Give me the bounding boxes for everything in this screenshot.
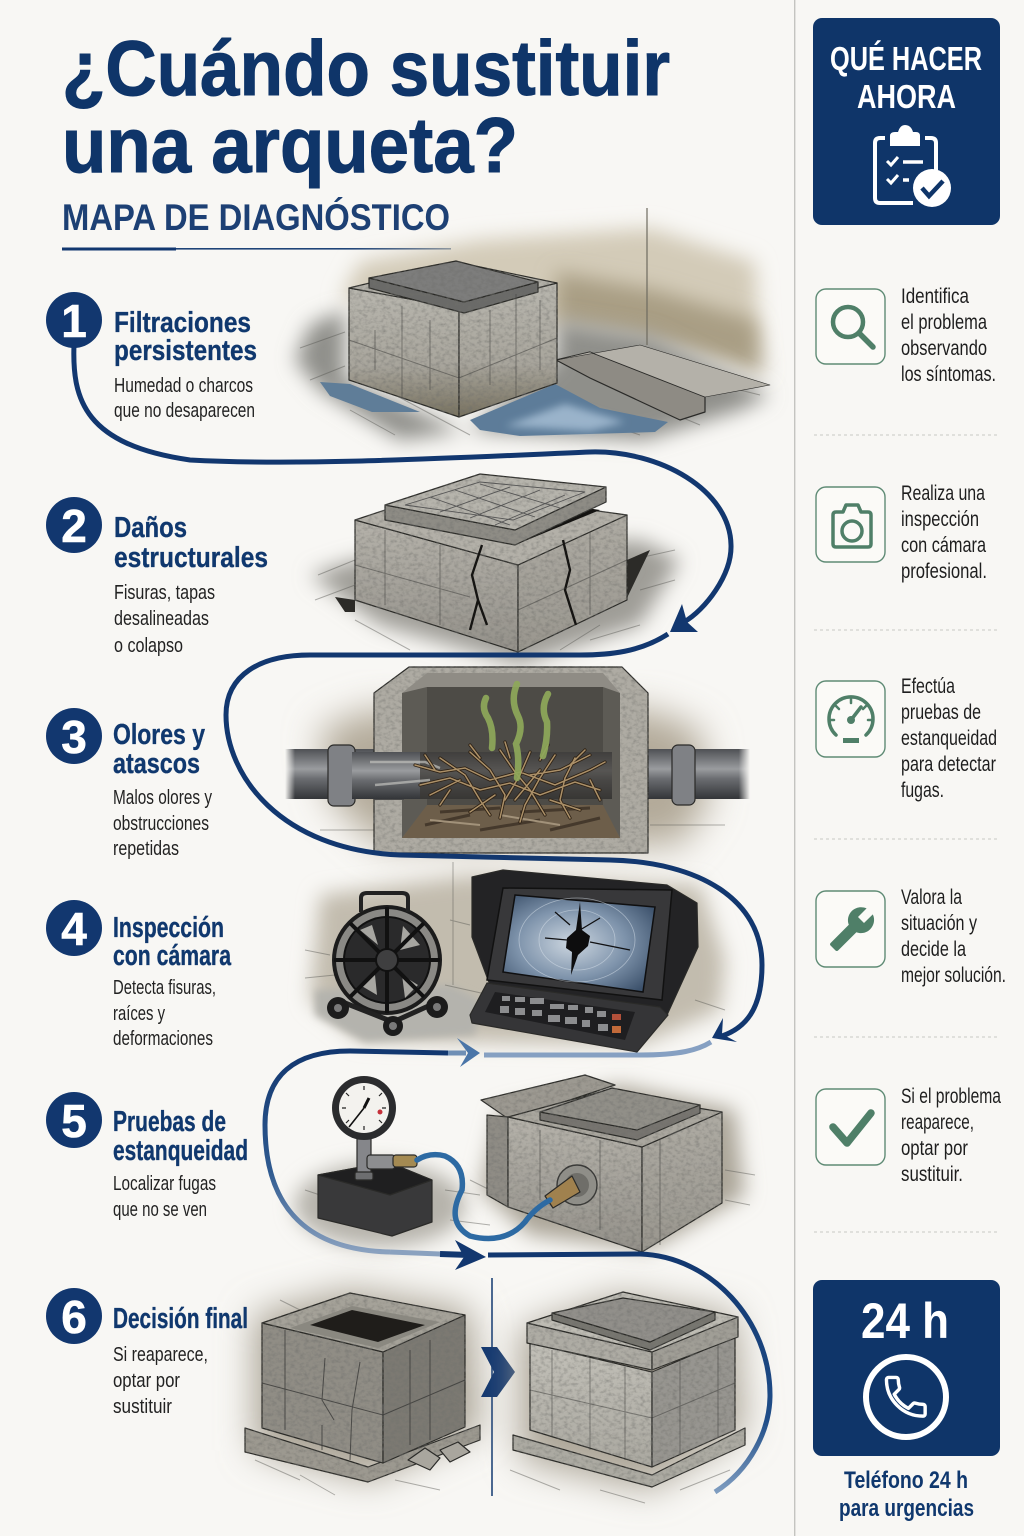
illustration 2: cracked chamber <box>310 474 680 665</box>
icon: check mark <box>816 1089 885 1165</box>
action 5 text: sustituir. <box>901 1163 963 1186</box>
step 2 description: Fisuras, tapas <box>114 582 215 604</box>
test chamber <box>481 1075 722 1252</box>
monitor <box>470 870 698 1052</box>
action 5 text: reaparece, <box>901 1111 974 1134</box>
action 1 text: el problema <box>901 311 987 334</box>
step 4 description: Detecta fisuras, <box>113 977 216 999</box>
step 6 <box>46 1288 248 1418</box>
step 5 description: Localizar fugas <box>113 1173 216 1195</box>
chevron arrow <box>481 1347 515 1397</box>
action 4 text: Valora la <box>901 886 962 909</box>
action 5 text <box>901 1085 1001 1186</box>
number badge 3 <box>46 708 102 764</box>
step 2 description: desalineadas <box>114 608 209 630</box>
title <box>62 24 670 189</box>
illustration 1: leaking chamber <box>295 208 770 440</box>
concrete frame <box>374 667 648 853</box>
number badge 5: 5 <box>61 1095 87 1147</box>
action 3 text: estanqueidad <box>901 727 997 750</box>
step 4 heading: con cámara <box>113 940 232 972</box>
flow arrow: connecting path between steps <box>74 345 770 1492</box>
cable reel <box>327 893 448 1036</box>
action 3 text: Efectúa <box>901 675 955 698</box>
step 3 heading <box>113 719 205 780</box>
panel heading: AHORA <box>857 78 956 115</box>
pressure gauge and pump <box>318 1076 432 1236</box>
action 3 text <box>901 675 997 802</box>
step 2 <box>46 497 268 657</box>
action 4: assess <box>816 886 1006 987</box>
panel heading <box>830 40 982 115</box>
step 5 <box>46 1092 248 1221</box>
step 2 heading <box>114 512 268 574</box>
action 3 text: para detectar <box>901 753 996 776</box>
number badge 5 <box>46 1092 102 1148</box>
step 3 heading: Olores y <box>113 719 205 751</box>
illustration 5: pressure test <box>295 1075 755 1252</box>
action 3 text: fugas. <box>901 779 944 802</box>
step 5 heading <box>113 1106 248 1167</box>
step 1 description: Humedad o charcos <box>114 375 253 397</box>
step 6 description: optar por <box>113 1370 180 1392</box>
step 6 description: Si reaparece, <box>113 1344 208 1366</box>
action 4 text: situación y <box>901 912 977 935</box>
step 3 heading: atascos <box>113 748 200 780</box>
phone caption: para urgencias <box>839 1495 974 1522</box>
step 6 description <box>113 1344 208 1418</box>
step 5 heading: estanqueidad <box>113 1135 248 1167</box>
step 1 description: que no desaparecen <box>114 400 255 422</box>
panel: qué hacer ahora <box>813 18 1000 225</box>
phone caption: Teléfono 24 h <box>844 1467 968 1494</box>
step 1 <box>46 292 257 422</box>
step 1 heading <box>114 307 257 367</box>
icon: pressure gauge <box>816 681 885 757</box>
number badge 1: 1 <box>61 295 87 347</box>
step 6 description: sustituir <box>113 1396 172 1418</box>
step 4 heading: Inspección <box>113 912 224 944</box>
step 4 description: deformaciones <box>113 1028 213 1050</box>
title: una arqueta? <box>62 101 518 189</box>
pipes <box>285 745 750 806</box>
new chamber <box>510 1292 745 1503</box>
step 2 heading: Daños <box>114 512 187 544</box>
step 3 description: repetidas <box>113 838 179 860</box>
action 2 text: con cámara <box>901 534 986 557</box>
number badge 2: 2 <box>61 500 87 552</box>
step 1 heading: Filtraciones <box>114 307 251 339</box>
illustration 6: damaged chamber versus new chamber <box>245 1278 745 1503</box>
number badge 6 <box>46 1288 102 1344</box>
step 5 description: que no se ven <box>113 1199 207 1221</box>
step 3 description <box>113 787 212 860</box>
step 2 heading: estructurales <box>114 542 268 574</box>
action 1 text <box>901 285 996 386</box>
icon: wrench <box>816 891 885 967</box>
action 1 text: observando <box>901 337 987 360</box>
step 4 description: raíces y <box>113 1003 165 1025</box>
subtitle <box>62 196 451 250</box>
phone caption <box>839 1467 974 1522</box>
step 6 heading: Decisión final <box>113 1303 248 1335</box>
number badge 1 <box>46 292 102 348</box>
step 5 description <box>113 1173 216 1221</box>
number badge 4: 4 <box>61 903 87 955</box>
title: ¿Cuándo sustituir <box>62 24 670 112</box>
action 4 text <box>901 886 1006 987</box>
illustration 4: camera inspection kit <box>305 862 725 1052</box>
step 3 <box>46 708 212 860</box>
action 2 text: Realiza una <box>901 482 985 505</box>
action 2 text <box>901 482 987 583</box>
step 2 description <box>114 582 215 657</box>
action 2 text: inspección <box>901 508 979 531</box>
number badge 4 <box>46 900 102 956</box>
action 4 text: decide la <box>901 938 966 961</box>
step 4 heading <box>113 912 232 972</box>
hose <box>417 1155 550 1239</box>
subtitle: MAPA DE DIAGNÓSTICO <box>62 196 450 238</box>
step 2 description: o colapso <box>114 635 183 657</box>
number badge 6: 6 <box>61 1291 87 1343</box>
illustration 3: chamber section with roots <box>285 667 750 853</box>
step 4 <box>46 900 232 1050</box>
old chamber <box>245 1290 480 1495</box>
action 3 text: pruebas de <box>901 701 981 724</box>
step 1 description <box>114 375 255 422</box>
step 4 description <box>113 977 216 1050</box>
green odour <box>484 684 548 778</box>
action 1: identify <box>816 285 996 386</box>
step 1 heading: persistentes <box>114 335 257 367</box>
step 5 heading: Pruebas de <box>113 1106 226 1138</box>
action 2: camera inspection <box>816 482 987 583</box>
number badge 3: 3 <box>61 711 87 763</box>
action 1 text: Identifica <box>901 285 969 308</box>
action 2 text: profesional. <box>901 560 987 583</box>
action 1 text: los síntomas. <box>901 363 996 386</box>
action 5: replace <box>816 1085 1001 1186</box>
icon: camera <box>816 487 885 562</box>
panel: 24 h emergency phone <box>813 1280 1000 1456</box>
panel heading: QUÉ HACER <box>830 40 982 77</box>
action 3: tightness test <box>816 675 997 802</box>
action 5 text: optar por <box>901 1137 968 1160</box>
icon: magnifier <box>816 289 885 364</box>
icon: clipboard with check <box>875 125 951 207</box>
icon: telephone <box>866 1357 946 1437</box>
24 h label: 24 h <box>861 1293 949 1349</box>
roots <box>415 742 605 822</box>
step 3 description: Malos olores y <box>113 787 212 809</box>
number badge 2 <box>46 497 102 553</box>
step 3 description: obstrucciones <box>113 813 209 835</box>
